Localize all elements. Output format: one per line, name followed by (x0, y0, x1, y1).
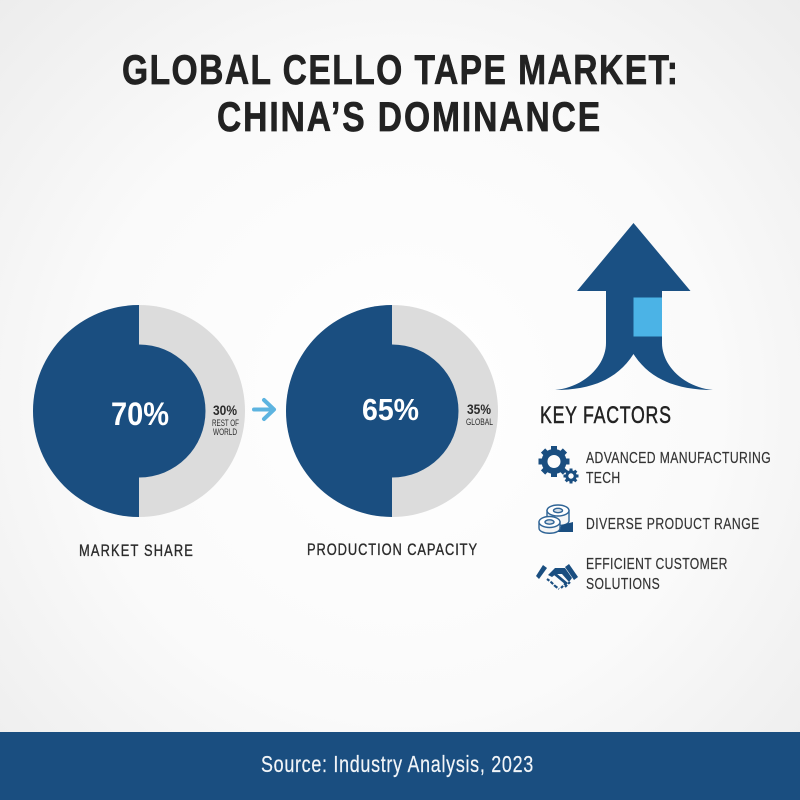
footer source text: Source: Industry Analysis, 2023 (261, 752, 533, 778)
text: efficient customer solutions: EFFICIENT CUSTOMER (586, 555, 727, 574)
icon: handshake (536, 564, 578, 589)
chart: market share donut (33, 305, 245, 517)
icon: growth arrow (555, 223, 713, 390)
label: 30% rest of world (212, 402, 239, 437)
arrow: between charts (254, 400, 274, 419)
label: market share: MARKET SHARE (79, 543, 193, 560)
label: 35% global (466, 401, 493, 427)
label: 30% rest of world: 30% (213, 402, 237, 418)
title (122, 48, 678, 141)
chart: production capacity donut (286, 305, 498, 517)
label: 35% global: GLOBAL (466, 417, 493, 427)
text: efficient customer solutions (586, 555, 727, 594)
text: advanced manufacturing tech: ADVANCED MANUFACTURING (586, 449, 771, 468)
label: production capacity: PRODUCTION CAPACITY (307, 542, 477, 559)
icon: gears (538, 446, 578, 484)
label: 30% rest of world: REST OF (212, 418, 239, 428)
label: 65%: 65% (362, 392, 419, 427)
text: advanced manufacturing tech (586, 449, 771, 488)
label: 35% global: 35% (467, 401, 491, 417)
label: 70%: 70% (111, 396, 169, 432)
heading: key factors: KEY FACTORS (540, 403, 671, 429)
title: CHINA’S DOMINANCE (217, 95, 600, 141)
text: efficient customer solutions: SOLUTIONS (586, 575, 660, 594)
label: 30% rest of world: WORLD (213, 427, 237, 437)
title: GLOBAL CELLO TAPE MARKET: (122, 48, 678, 94)
footer bar (0, 732, 800, 800)
text: advanced manufacturing tech: TECH (586, 469, 620, 488)
icon: tape rolls (539, 505, 573, 533)
text: diverse product range: DIVERSE PRODUCT RANGE (586, 515, 759, 534)
